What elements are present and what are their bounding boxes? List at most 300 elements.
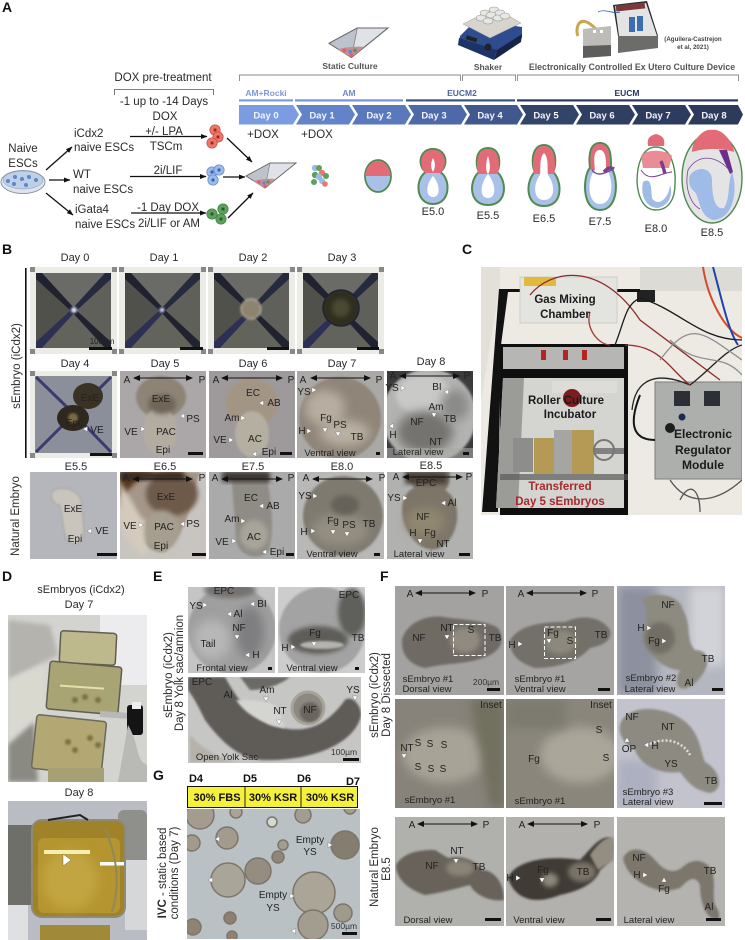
labels: NF: [232, 623, 246, 634]
labels: [624, 853, 721, 926]
labels: NF: [632, 853, 646, 864]
labels: A: [303, 473, 310, 484]
text: cell line names: iCdx2: [74, 128, 103, 140]
icon: day 2 embryo: [365, 160, 391, 192]
icon: ex utero culture device: [577, 1, 658, 58]
timeline chevrons: Day 5: [533, 110, 559, 122]
panel G: timeline bar: D6: [297, 773, 311, 785]
brackets: [240, 75, 738, 81]
labels: NT: [400, 743, 414, 754]
labels: P: [288, 375, 295, 386]
icon: shaker: [458, 7, 522, 60]
arrows: treatment lines: [130, 136, 207, 213]
arrows: branch to cell lines: [46, 147, 73, 215]
panel B: day headings: [61, 252, 445, 473]
labels: sEmbryo #3: [623, 787, 673, 798]
labels: ExE: [157, 492, 175, 503]
labels: Transferred: [528, 481, 592, 493]
text: treatment conditions: [120, 96, 208, 230]
icon: E5.5: [472, 148, 504, 205]
panel B row 1: day 1 microwell: [119, 267, 206, 354]
panel B row 3: E6.5 embryo: [120, 472, 206, 559]
labels: [123, 473, 206, 556]
labels: Chamber: [540, 309, 590, 321]
panel B: day headings: E6.5: [154, 461, 176, 473]
timeline chevrons: Day 7: [645, 110, 671, 122]
labels: AC: [248, 434, 262, 445]
wires: [530, 267, 742, 512]
labels: sEmbryo #1: [515, 796, 565, 807]
labels: S: [567, 636, 574, 647]
panel B row 3: E5.5 embryo: [30, 472, 117, 559]
citation: et al, 2021): [677, 44, 709, 51]
panel letter D: D: [2, 568, 12, 584]
labels: Ventral view: [286, 663, 338, 674]
text: cell line names: iGata4: [75, 204, 109, 216]
panel B row 1: day 3 microwell: [297, 267, 384, 354]
labels: VE: [90, 425, 104, 436]
side label: yolk sac: [163, 615, 186, 731]
labels: Ventral view: [513, 915, 565, 926]
labels: BI: [257, 599, 267, 610]
labels: Incubator: [544, 409, 597, 421]
labels: NF: [412, 633, 426, 644]
labels: H: [298, 426, 306, 437]
text: naive ESCs: Naive: [8, 143, 38, 155]
labels: Epi: [270, 547, 284, 558]
labels: ExE: [81, 393, 99, 404]
+DOX labels: +DOX: [247, 129, 279, 141]
labels: A: [409, 820, 416, 831]
labels: [622, 712, 722, 808]
labels: Empty: [296, 835, 324, 846]
panel B: day headings: Day 5: [151, 358, 179, 370]
labels: P: [376, 375, 383, 386]
labels: EPC: [214, 586, 234, 597]
labels: TB: [702, 654, 715, 665]
icon: red cells: [207, 125, 223, 148]
labels: EC: [244, 493, 258, 504]
labels: EPC: [192, 677, 212, 688]
panel B: day headings: Day 3: [328, 252, 356, 264]
labels: Fg: [327, 516, 339, 527]
labels: AC: [247, 532, 261, 543]
labels: PS: [333, 420, 347, 431]
labels: A: [213, 375, 220, 386]
labels: Open Yolk Sac: [196, 752, 258, 763]
labels: [625, 600, 723, 695]
side label: IVC: [157, 826, 181, 919]
labels: Lateral view: [623, 797, 673, 808]
icon: microwell seeded: [246, 163, 296, 188]
panel F: natural dorsal: [395, 817, 504, 926]
labels: 100µm: [331, 747, 357, 757]
labels: [66, 393, 104, 436]
labels: NF: [303, 705, 317, 716]
gas mixing chamber: [520, 277, 617, 323]
labels: P: [483, 820, 490, 831]
labels: Fg: [648, 636, 660, 647]
panel B: day headings: Day 0: [61, 252, 89, 264]
labels: Lateral view: [624, 915, 674, 926]
labels: NT: [450, 846, 464, 857]
labels: Ventral view: [304, 448, 356, 459]
labels: Al: [685, 678, 693, 689]
labels: Lateral view: [393, 447, 443, 458]
labels: [387, 472, 473, 560]
labels: TB: [489, 633, 502, 644]
panel B row 2: day 7 embryo: [297, 371, 384, 459]
timeline chevrons: [239, 105, 743, 124]
panel E: open yolk sac: [188, 677, 361, 763]
labels: NT: [273, 706, 287, 717]
labels: [213, 375, 295, 458]
panel A: media bars: [239, 88, 738, 102]
labels: S: [415, 738, 422, 749]
icon: cell aggregate: [311, 165, 329, 187]
labels: NT: [436, 539, 450, 550]
labels: Electronic: [674, 427, 732, 441]
panel B row 1: day 0 microwell: 100µm: [90, 337, 115, 346]
panel A: culture devices: [240, 1, 738, 81]
labels: [508, 589, 610, 695]
labels: VE: [123, 521, 137, 532]
panel F: dorsal view: [395, 586, 504, 695]
labels: S: [441, 740, 448, 751]
arrows: into static culture: [223, 138, 253, 218]
labels: [400, 700, 502, 806]
labels: BI: [432, 382, 442, 393]
panel B row 3: E8.5 embryo: [387, 472, 473, 560]
labels: AB: [266, 501, 280, 512]
side label: natural embryo: Natural Embryo: [10, 476, 22, 556]
panel letter C: C: [462, 241, 472, 257]
media labels: [245, 88, 640, 98]
labels: Dorsal view: [403, 915, 453, 926]
panel B row 3: E8.0 embryo: [297, 472, 386, 560]
panel D: heading: [37, 584, 125, 611]
panel A: DOX pre-treatment: [114, 72, 329, 230]
text: treatment conditions: 2i/LIF or AM: [138, 218, 200, 230]
panel B: day headings: Day 7: [328, 358, 356, 370]
panel G: timeline bar: [188, 773, 360, 808]
labels: Am: [224, 514, 240, 525]
labels: S: [427, 739, 434, 750]
citation: (Aguilera-Castrejon: [664, 36, 722, 43]
labels: sEmbryo #1: [515, 674, 565, 685]
panel A: starting cell lines: [1, 128, 135, 231]
text: treatment conditions: +/- LPA: [145, 126, 183, 138]
labels: TB: [473, 862, 486, 873]
labels: [192, 677, 360, 763]
panel B: day headings: Day 1: [150, 252, 178, 264]
panel B row 3: E7.5 embryo: [209, 472, 295, 559]
panel F: ventral view: [506, 586, 614, 695]
labels: A: [518, 589, 525, 600]
panel B: day headings: E5.5: [65, 461, 87, 473]
labels: H: [651, 741, 659, 752]
labels: Epi: [68, 534, 82, 545]
timeline chevrons: Day 0: [253, 110, 279, 122]
text: cell line names: WT: [73, 169, 91, 181]
labels: Epi: [156, 445, 170, 456]
panel B: day headings: E7.5: [242, 461, 264, 473]
labels: YS: [298, 491, 312, 502]
labels: Regulator: [675, 443, 731, 457]
labels: Frontal view: [196, 663, 248, 674]
media lines: [239, 99, 738, 102]
labels: [403, 820, 501, 926]
labels: P: [482, 589, 489, 600]
labels: VE: [213, 435, 227, 446]
labels: NF: [661, 600, 675, 611]
labels: A: [519, 820, 526, 831]
incubator: [496, 344, 628, 515]
labels: S: [468, 625, 475, 636]
labels: Empty: [259, 890, 287, 901]
panel C: device photo: [481, 267, 742, 515]
labels: Ventral view: [514, 684, 566, 695]
labels: TB: [705, 776, 718, 787]
labels: A: [390, 371, 397, 382]
icon: static culture pyramid: [329, 28, 388, 58]
panel B: day headings: Day 6: [239, 358, 267, 370]
labels: Fg: [537, 865, 549, 876]
labels: Inset: [590, 700, 612, 711]
text: naive ESCs: ESCs: [8, 158, 38, 170]
labels: TB: [352, 633, 365, 644]
labels: NT: [429, 437, 443, 448]
labels: [124, 375, 206, 456]
panel B: day headings: Day 4: [61, 358, 89, 370]
labels: Epi: [66, 418, 80, 429]
labels: YS: [385, 383, 399, 394]
panel E: ventral view: [278, 587, 366, 674]
text: treatment conditions: TSCm: [150, 141, 182, 153]
labels: H: [252, 650, 260, 661]
labels: TB: [595, 630, 608, 641]
icon: petri dish: [1, 170, 45, 194]
label: E5.0: E5.0: [422, 206, 444, 218]
media labels: EUCM: [614, 88, 640, 98]
labels: Am: [224, 413, 240, 424]
panel G: timeline bar: 30% KSR: [249, 792, 297, 804]
labels: PS: [342, 520, 356, 531]
label: E6.5: E6.5: [533, 213, 555, 225]
labels: Inset: [480, 700, 502, 711]
panel D: heading: Day 7: [65, 599, 93, 611]
labels: [64, 504, 117, 556]
panel F: embryo 3 lateral: [617, 699, 725, 808]
panel B row 1: day 2 microwell: [208, 267, 295, 354]
labels: [281, 590, 365, 674]
labels: H: [508, 640, 516, 651]
labels: YS: [346, 685, 360, 696]
panel B: day headings: E8.5: [420, 460, 442, 472]
panel B row 1: day 0 microwell: [30, 267, 117, 354]
icon: E6.5: [528, 145, 560, 206]
labels: A: [300, 375, 307, 386]
panel G: timeline bar: D5: [243, 773, 257, 785]
timeline chevrons: Day 1: [309, 110, 335, 122]
labels: Fg: [528, 754, 540, 765]
icon: blue cells: [207, 165, 224, 185]
embryo schematics: [365, 130, 742, 239]
labels: Al: [448, 498, 456, 509]
labels: [385, 371, 471, 458]
icon: E8.0: [637, 134, 675, 210]
labels: A: [212, 473, 219, 484]
panel B row 2: day 5 embryo: [120, 371, 206, 458]
labels: P: [592, 589, 599, 600]
side label: dissected: sEmbryo (iCdx2): [369, 652, 381, 738]
labels: H: [409, 528, 417, 539]
+DOX labels: +DOX: [301, 129, 333, 141]
labels: Am: [428, 402, 444, 413]
labels: TB: [577, 867, 590, 878]
text: cell line names: naive ESCs: [73, 184, 133, 196]
panel B row 2: day 8 embryo: [382, 369, 476, 463]
labels: S: [440, 764, 447, 775]
labels: Fg: [309, 628, 321, 639]
side label: yolk sac: Day 8 Yolk sac/amnion: [174, 615, 186, 731]
icon: E8.5: [682, 130, 742, 223]
side label: IVC: IVC - static based: [157, 828, 169, 918]
labels: Fg: [658, 884, 670, 895]
panel D: heading: sEmbryos (iCdx2): [37, 584, 125, 596]
labels: AB: [267, 398, 281, 409]
panel letter F: F: [380, 568, 389, 584]
side label: natural E8.5: [369, 827, 393, 907]
timeline chevrons: Day 3: [421, 110, 447, 122]
labels: Fg: [320, 413, 332, 424]
labels: EPC: [339, 590, 359, 601]
labels: TB: [704, 866, 717, 877]
labels: S: [415, 762, 422, 773]
media labels: AM+Rocki: [245, 88, 287, 98]
labels: OP: [622, 744, 637, 755]
timeline chevrons: Day 2: [366, 110, 392, 122]
timeline chevrons: Day 6: [589, 110, 615, 122]
labels: NF: [425, 861, 439, 872]
label: E7.5: E7.5: [589, 216, 611, 228]
labels: sEmbryo #1: [403, 674, 453, 685]
panel G: timeline bar: D7: [346, 776, 360, 788]
labels: [402, 589, 502, 695]
icon: green cells: [207, 204, 228, 224]
+DOX labels: [247, 129, 333, 141]
panel D: day 8 heading: Day 8: [65, 787, 93, 799]
labels: VE: [215, 537, 229, 548]
labels: [189, 586, 272, 674]
labels: A: [124, 375, 131, 386]
labels: NF: [410, 417, 424, 428]
panel D: day 8 bottle photo: [8, 801, 147, 940]
side label: dissected: Day 8 Dissected: [381, 653, 393, 737]
text: treatment conditions: DOX: [153, 111, 178, 123]
labels: H: [506, 873, 514, 884]
text: cell line names: naive ESCs: [75, 219, 135, 231]
labels: sEmbryo #1: [405, 795, 455, 806]
labels: TB: [363, 519, 376, 530]
labels: P: [288, 473, 295, 484]
labels: [515, 294, 732, 508]
labels: H: [633, 870, 641, 881]
labels: Day 5 sEmbryos: [515, 496, 605, 508]
labels: NF: [416, 512, 430, 523]
labels: Fg: [547, 628, 559, 639]
labels: YS: [303, 847, 317, 858]
labels: EC: [246, 388, 260, 399]
panel F: natural lateral: [617, 817, 725, 926]
labels: Epi: [154, 541, 168, 552]
label: electronic device: Electronically Controlled Ex Utero Culture Device: [529, 62, 735, 72]
labels: Lateral view: [625, 684, 675, 695]
labels: Roller Culture: [528, 395, 604, 407]
labels: H: [389, 430, 397, 441]
side label: natural E8.5: Natural Embryo: [369, 827, 381, 907]
labels: Epi: [262, 447, 276, 458]
panel B row 2: day 6 embryo: [209, 371, 295, 458]
labels: Ventral view: [306, 549, 358, 560]
text: treatment conditions: 2i/LIF: [154, 165, 182, 177]
labels: Lateral view: [394, 549, 444, 560]
labels: Fg: [424, 528, 436, 539]
panel G: microscopy image: [184, 801, 360, 940]
labels: P: [379, 473, 386, 484]
bracket: [114, 90, 214, 95]
labels: Al: [234, 609, 242, 620]
labels: YS: [189, 601, 203, 612]
labels: Tail: [200, 639, 216, 650]
labels: P: [466, 472, 473, 483]
panel letter E: E: [153, 568, 162, 584]
timeline chevrons: Day 4: [477, 110, 503, 122]
side label: natural E8.5: E8.5: [381, 857, 393, 881]
labels: NF: [625, 712, 639, 723]
labels: [212, 473, 295, 558]
panel F: embryo 2 lateral: [617, 586, 725, 695]
icon: E5.0: [418, 149, 448, 204]
labels: P: [464, 371, 471, 382]
side label: dissected: [369, 652, 393, 738]
panel B: day headings: Day 2: [239, 252, 267, 264]
labels: YS: [297, 387, 311, 398]
panel E: frontal view: [188, 582, 276, 674]
labels: Module: [682, 458, 724, 472]
panel letter B: B: [2, 241, 12, 257]
labels: P: [594, 820, 601, 831]
labels: YS: [387, 493, 401, 504]
labels: 200µm: [473, 677, 499, 687]
labels: ExE: [152, 394, 170, 405]
panel B: day headings: E8.0: [331, 461, 353, 473]
labels: VE: [124, 427, 138, 438]
labels: P: [199, 473, 206, 484]
labels: ExE: [64, 504, 82, 515]
label: E8.5: E8.5: [701, 227, 723, 239]
text: cell line names: [73, 128, 135, 231]
labels: H: [281, 643, 289, 654]
base black edge: [482, 289, 640, 512]
text: treatment conditions: -1 Day DOX: [137, 202, 199, 214]
labels: Dorsal view: [402, 684, 452, 695]
labels: YS: [266, 903, 280, 914]
labels: H: [637, 623, 645, 634]
panel letter G: G: [153, 767, 164, 783]
icon: E7.5: [585, 143, 616, 210]
side label: yolk sac: sEmbryo (iCdx2): [163, 632, 175, 718]
